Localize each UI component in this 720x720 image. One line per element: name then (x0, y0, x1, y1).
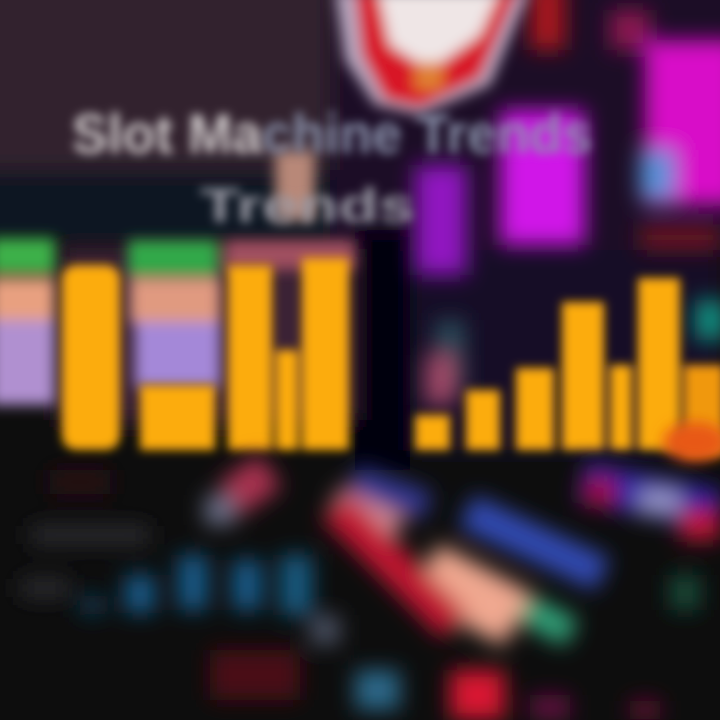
panel: left pink and green blocks (0, 150, 355, 405)
bar 11 (638, 278, 680, 450)
title (72, 102, 592, 233)
bar 7 (466, 390, 500, 450)
bar 1 (62, 265, 120, 450)
icon: heart logo emblem (335, 0, 530, 115)
bar 10 (610, 365, 632, 450)
bar accent (663, 422, 720, 462)
bar 3 (228, 265, 272, 450)
panel: top right neon lights (415, 0, 720, 405)
bar 4 (276, 350, 298, 450)
bar 9 (562, 302, 604, 450)
title line 2: Trends (200, 180, 415, 233)
panel: slot machine controls (20, 454, 720, 720)
bar chart (62, 258, 720, 455)
bar 12 (684, 365, 720, 455)
bar 6 (415, 415, 450, 450)
bar 5 (302, 258, 349, 450)
title line 1: Slot Machine Trends (72, 102, 592, 165)
bar 8 (516, 368, 554, 450)
bar 2 (140, 385, 215, 450)
